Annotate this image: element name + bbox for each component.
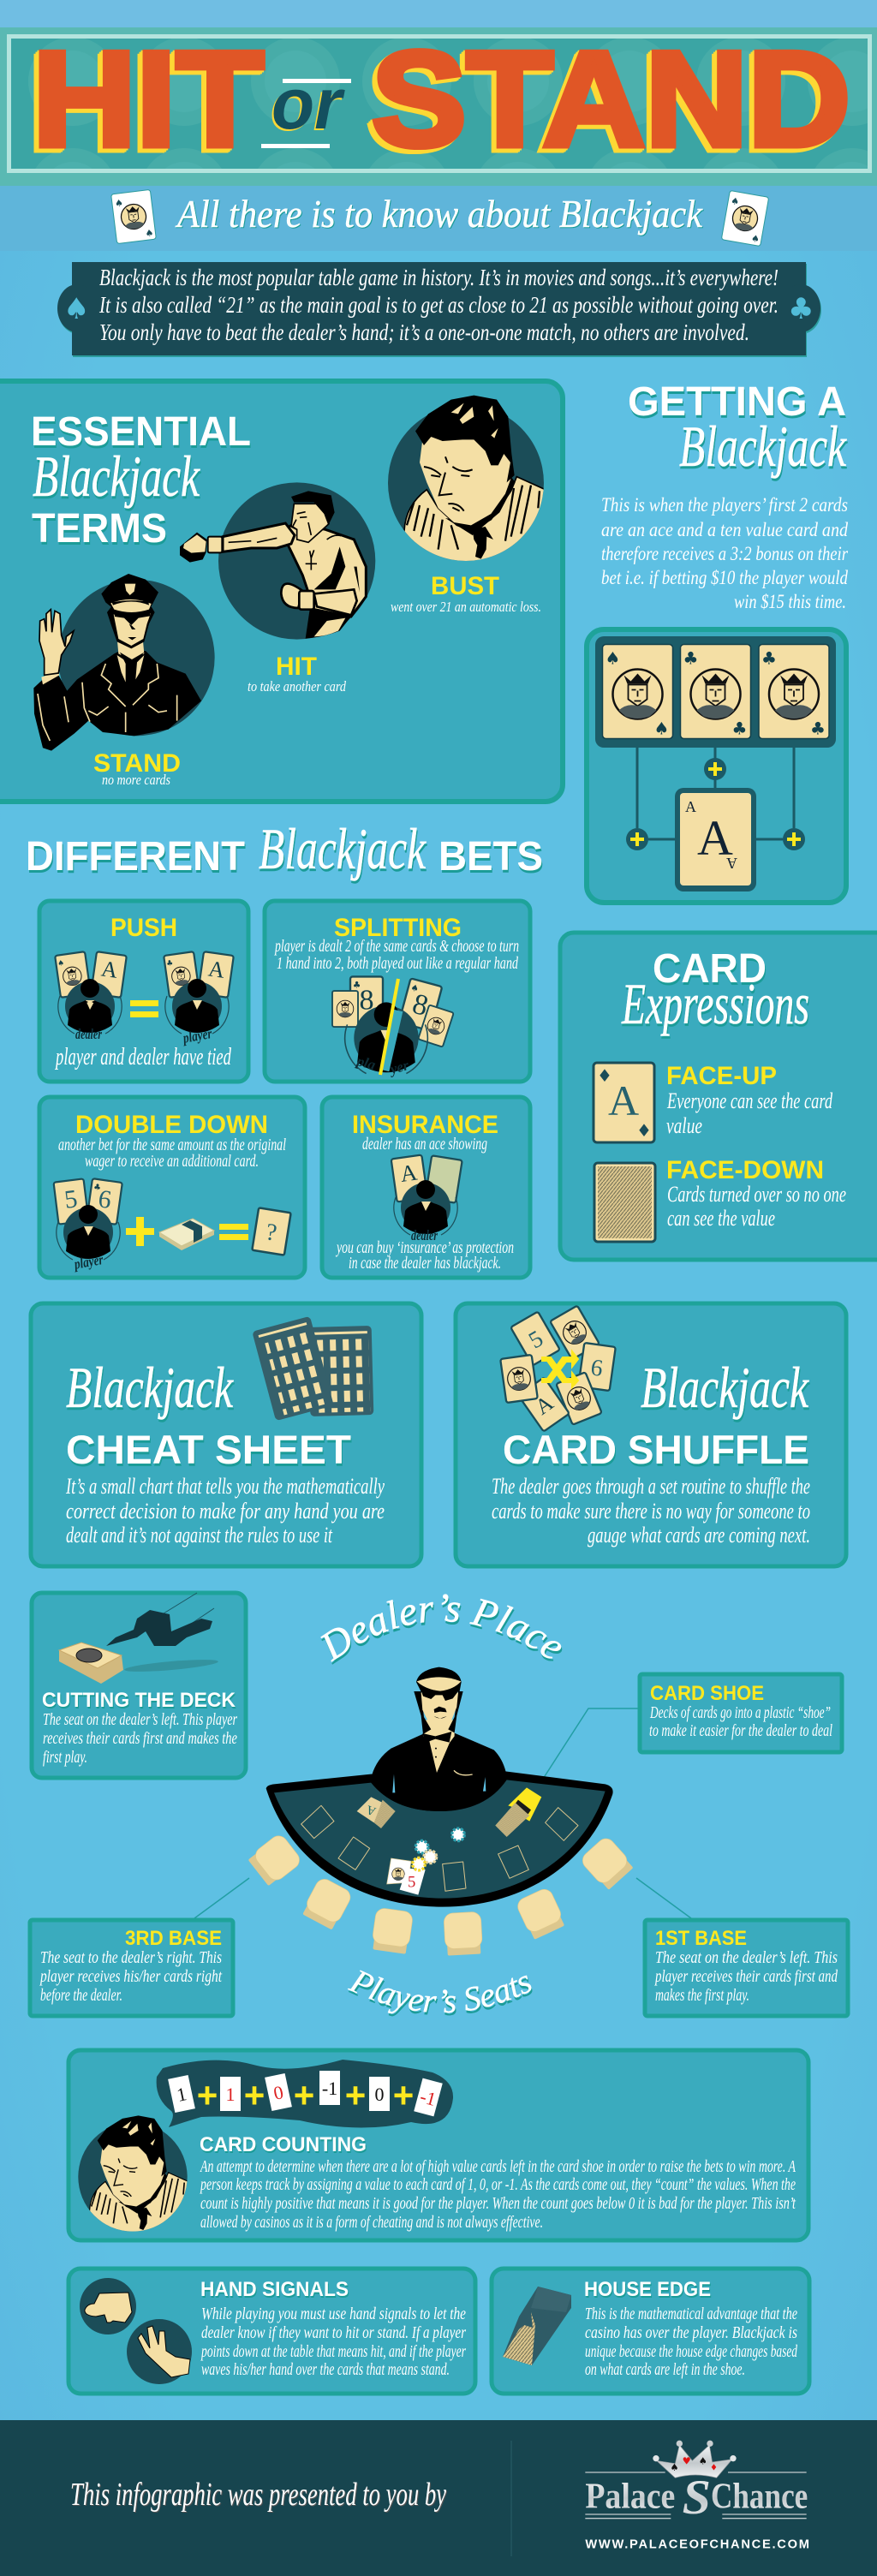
dealer figure [371, 1667, 506, 1811]
icon: split player: yer [387, 1057, 411, 1078]
text: hand signals description [200, 2305, 466, 2379]
speech bubble with count: + [197, 2075, 218, 2115]
heading: card expressions: CARD [653, 946, 767, 992]
illustration: bust man [388, 396, 546, 568]
icon: pointing hand [80, 2278, 136, 2334]
panel: card shoe [537, 1674, 842, 1788]
icon: player with cards [164, 951, 234, 1046]
text: house edge description: casino has over the player. Blackjack is [585, 2323, 797, 2342]
cards: three ten-value cards: ♠ [605, 647, 620, 668]
caption: dealer has an ace: dealer has an ace showing [362, 1135, 487, 1154]
panel: push [39, 901, 248, 1082]
icon: shuffle arrows [542, 1351, 578, 1387]
title: 3rd base: 3RD BASE [125, 1927, 222, 1950]
heading: getting a blackjack [628, 379, 847, 479]
panel: hand signals [69, 2269, 475, 2394]
text: face-up: FACE-UP [666, 1062, 777, 1090]
icon: ring of cards: A [530, 1390, 558, 1420]
text: cheat sheet description: dealt and it’s not against the rules to use it [66, 1523, 333, 1547]
icon: ring of cards: 5 [524, 1325, 547, 1353]
heading: essential: ESSENTIAL [31, 409, 251, 455]
label: stand: STAND [93, 749, 181, 778]
title: or: or [271, 63, 345, 144]
label: hit: HIT [276, 653, 317, 681]
title: double down: DOUBLE DOWN [75, 1111, 268, 1139]
text: shuffle description [492, 1474, 810, 1547]
cards: three ten-value cards: ♣ [731, 718, 747, 738]
icon: cheat sheets [252, 1316, 373, 1421]
text: face-up [666, 1062, 833, 1138]
heading: getting a blackjack: GETTING A [628, 379, 846, 425]
cards: three ten-value cards [603, 644, 829, 738]
logo: palace of chance: ♦ [710, 2463, 718, 2472]
card: face-up: ♦ [597, 1065, 612, 1086]
text: hand signals description: points down at the table that means hit, and if the player [200, 2342, 466, 2361]
text: house edge description [585, 2305, 798, 2379]
card: ace: A [697, 810, 733, 866]
logo: palace of chance: S [683, 2472, 711, 2525]
title: hand signals: HAND SIGNALS [200, 2278, 349, 2301]
footer [0, 2420, 877, 2576]
text: cutting description: The seat on the dealer’s left. This player [43, 1710, 237, 1729]
blackjack table and seats [247, 1667, 635, 1956]
title: cutting the deck: CUTTING THE DECK [42, 1689, 236, 1712]
text: cutting description: receives their cards first and makes the [43, 1729, 237, 1748]
heading: different blackjack bets: BETS [438, 834, 543, 880]
label: hit [248, 653, 346, 695]
text: 3rd base description [39, 1948, 222, 2005]
icon: equals [130, 1000, 158, 1017]
icon: dealer with cards: dealer [75, 1026, 102, 1042]
icon: right card: ♠ [750, 233, 761, 245]
heading: blackjack card shuffle: Blackjack [641, 1355, 809, 1420]
icon: question card [252, 1208, 291, 1255]
icon: dealer with cards [55, 951, 127, 1042]
icon: player with 5 and 6 [54, 1178, 122, 1273]
icon: split player: ♠ [409, 982, 420, 994]
logo: palace of chance: Chance [711, 2476, 808, 2516]
icon: dealer with ace and hidden card: A [398, 1159, 419, 1187]
text: getting a blackjack description: are an ace and a ten value card and [601, 519, 848, 540]
caption: double down: another bet for the same amount as the original [58, 1136, 286, 1154]
title: STAND: STAND [372, 24, 850, 175]
icon: ring of cards [500, 1305, 616, 1432]
heading: blackjack cheat sheet: Blackjack [66, 1355, 234, 1420]
icon: player with 5 and 6: player [72, 1251, 104, 1273]
panel: house edge [492, 2269, 809, 2394]
heading: player's seats: Player’s Seats [348, 1970, 533, 2016]
speech bubble with count: 0 [271, 2081, 285, 2104]
portrait: counting man [78, 2115, 188, 2237]
label: bust: BUST [431, 572, 499, 600]
icon: player with 5 and 6: ♣ [92, 1183, 102, 1193]
text: card shoe description [649, 1703, 832, 1740]
heading: blackjack cheat sheet [66, 1355, 351, 1472]
logo: palace of chance: ♠ [699, 2455, 707, 2467]
speech bubble with count: 1 [175, 2083, 188, 2106]
footer text: This infographic was presented to you by [70, 2477, 446, 2513]
panel: blackjack hand diagram [587, 629, 846, 903]
speech bubble with count: 1 [226, 2084, 235, 2105]
panel: card counting [69, 2050, 808, 2240]
icon: player with cards: ♣ [166, 959, 174, 969]
text: 1st base description: The seat on the dealer’s left. This [655, 1948, 838, 1967]
icon: player with cards: player [181, 1025, 213, 1046]
heading: essential: TERMS [32, 506, 167, 552]
panel: cheat sheet [31, 1303, 421, 1566]
cards: three ten-value cards: ♠ [654, 718, 669, 738]
caption: splitting: 1 hand into 2, both played out like a regular hand [277, 954, 519, 973]
title: splitting: SPLITTING [334, 914, 462, 942]
text: face-up: value [666, 1113, 702, 1138]
betting spots [301, 1805, 578, 1891]
icon: plus [126, 1217, 154, 1246]
title: house edge: HOUSE EDGE [584, 2278, 711, 2301]
card: face-down [594, 1163, 655, 1242]
card: face-up [594, 1063, 654, 1142]
text: hand signals description: While playing you must use hand signals to let the [201, 2305, 466, 2323]
caption: double down [58, 1136, 286, 1171]
card: ace: A [726, 855, 737, 872]
caption: insurance detail [336, 1238, 514, 1273]
text: house edge description: This is the mathematical advantage that the [585, 2305, 797, 2323]
icon: split player: 8 [409, 988, 432, 1023]
panel: 3rd base [30, 1878, 249, 2016]
text: card counting description [200, 2157, 796, 2232]
label: bust [391, 572, 541, 615]
text: 1st base description [654, 1948, 838, 2005]
header banner [0, 24, 877, 186]
text: hand signals description: dealer know if they want to hit or stand. If a player [201, 2323, 466, 2342]
icon: spade: ♠ [63, 292, 89, 326]
title: card shoe: CARD SHOE [650, 1682, 764, 1705]
text: 1st base description: makes the first play. [655, 1986, 749, 2005]
panel: essential blackjack terms [0, 381, 563, 802]
text: cutting description [43, 1710, 237, 1767]
title: card counting: CARD COUNTING [200, 2133, 367, 2156]
icon: player with cards: A [206, 956, 226, 983]
speech bubble with count [157, 2060, 453, 2128]
icon: split player: pla [354, 1052, 378, 1073]
speech bubble with count: + [393, 2075, 414, 2115]
speech bubble with count: + [294, 2075, 314, 2115]
panel: double down [39, 1097, 305, 1278]
icon: split player [332, 976, 454, 1078]
intro panel [57, 262, 820, 355]
icon: money stack [159, 1219, 214, 1250]
card: ace: A [685, 798, 696, 815]
logo: palace of chance: WWW.PALACEOFCHANCE.COM [585, 2538, 809, 2552]
title: insurance: INSURANCE [352, 1111, 498, 1139]
heading: different blackjack bets: DIFFERENT [26, 834, 245, 880]
speech bubble with count: + [345, 2075, 366, 2115]
intro text [98, 265, 779, 345]
label: bust: went over 21 an automatic loss. [391, 599, 541, 615]
icon: left card [111, 189, 156, 244]
text: cutting description: first play. [43, 1748, 87, 1767]
logo: palace of chance [585, 2441, 809, 2552]
text: house edge description: on what cards are left in the shoe. [585, 2360, 745, 2379]
title: push: PUSH [110, 914, 177, 942]
seats [247, 1833, 635, 1956]
subtitle strip [0, 186, 877, 251]
heading: blackjack card shuffle [503, 1355, 809, 1472]
panel: card shuffle [456, 1303, 846, 1566]
panel: cutting the deck [32, 1593, 246, 1778]
heading: blackjack card shuffle: CARD SHUFFLE [503, 1427, 809, 1472]
speech bubble with count: 0 [375, 2084, 384, 2105]
heading: dealer's place: Dealer’s Place [320, 1594, 562, 1665]
icon: card shoe [503, 2287, 571, 2365]
cards: three ten-value cards: ♣ [683, 647, 698, 668]
caption: insurance detail: in case the dealer has blackjack. [349, 1254, 501, 1273]
card: face-up: A [608, 1076, 639, 1124]
table cards and chips [357, 1787, 541, 1895]
panel: 1st base [636, 1878, 848, 2016]
caption: insurance detail: you can buy ‘insurance’ as protection [336, 1238, 514, 1257]
subtitle text: All there is to know about Blackjack [175, 192, 703, 236]
panel: card expressions [560, 933, 877, 1260]
text: face-down: can see the value [667, 1206, 775, 1231]
icon: ring of cards: 6 [589, 1353, 605, 1381]
logo: palace of chance: Palace [585, 2476, 675, 2516]
icon: right card: ♠ [730, 195, 740, 207]
cards: three ten-value cards: ♣ [810, 718, 826, 738]
caption: double down: wager to receive an additional card. [85, 1152, 259, 1171]
text: cheat sheet description: It’s a small chart that tells you the mathematically [65, 1474, 385, 1499]
icon: split player: 8 [359, 984, 374, 1016]
icon: equals [219, 1224, 248, 1240]
speech bubble with count: + [244, 2075, 265, 2115]
logo: palace of chance: ♠ [670, 2461, 678, 2473]
card: ace [675, 788, 756, 891]
heading: different blackjack bets [26, 816, 543, 881]
text: 3rd base description: The seat to the dealer’s right. This [40, 1948, 222, 1967]
text: face-down [666, 1156, 846, 1231]
text: cheat sheet description [65, 1474, 385, 1547]
heading: essential [31, 409, 251, 552]
heading: blackjack cheat sheet: CHEAT SHEET [66, 1427, 351, 1472]
speech bubble with count: -1 [418, 2085, 438, 2110]
icon: player with 5 and 6: 6 [97, 1184, 113, 1214]
caption: splitting [274, 937, 519, 973]
logo: palace of chance: ♥ [683, 2455, 691, 2467]
icon: split player: ♣ [353, 981, 361, 991]
illustration: officer [33, 574, 215, 751]
title: 1st base: 1ST BASE [655, 1927, 747, 1950]
icon: dealer with cards: ♠ [57, 959, 65, 969]
icon: club: ♣ [788, 292, 814, 326]
text: cheat sheet description: correct decision to make for any hand you are [66, 1499, 385, 1524]
text: hand signals description: waves his/her hand over the cards that means stand. [201, 2360, 450, 2379]
icon: dealer with ace and hidden card: dealer [411, 1227, 438, 1243]
panel: splitting [265, 901, 530, 1082]
label: hit: to take another card [248, 678, 346, 695]
card: face-up: ♦ [636, 1120, 652, 1141]
text: 3rd base description: player receives his/her cards right [39, 1967, 222, 1986]
text: getting a blackjack description [601, 494, 849, 612]
text: getting a blackjack description: win $15 this time. [734, 591, 846, 612]
icon: ninja over deck [59, 1593, 218, 1684]
caption: splitting: player is dealt 2 of the same cards & choose to turn [274, 937, 519, 956]
text: 3rd base description: before the dealer. [40, 1986, 122, 2005]
caption: push: player and dealer have tied [55, 1044, 232, 1070]
icon: waving hand [127, 2319, 192, 2384]
icon: dealer with ace and hidden card [391, 1155, 462, 1243]
table cards and chips: 5 [408, 1873, 415, 1891]
title: HIT: HIT [33, 24, 264, 175]
table cards and chips: A [364, 1802, 378, 1818]
icon: dealer with cards: A [99, 956, 119, 983]
icon: plus markers [626, 758, 805, 850]
icon: question card: ? [264, 1219, 278, 1247]
top strip [0, 0, 877, 27]
icon: left card: ♠ [114, 197, 124, 210]
cards: three ten-value cards: ♣ [761, 647, 777, 668]
icon: player with 5 and 6: 5 [63, 1184, 79, 1214]
heading: card expressions [621, 946, 809, 1036]
label: stand: no more cards [102, 772, 170, 788]
heading: essential: Blackjack [33, 444, 200, 509]
icon: right card [721, 190, 769, 247]
illustration: boxer [180, 482, 375, 640]
text: card counting description: allowed by casinos as it is a form of cheating and is not always effective. [200, 2213, 543, 2232]
heading: different blackjack bets: Blackjack [259, 816, 427, 881]
panel: insurance [322, 1097, 530, 1278]
text: face-down: FACE-DOWN [666, 1156, 824, 1184]
speech bubble with count: -1 [322, 2078, 337, 2099]
icon: left card: ♠ [145, 227, 154, 239]
